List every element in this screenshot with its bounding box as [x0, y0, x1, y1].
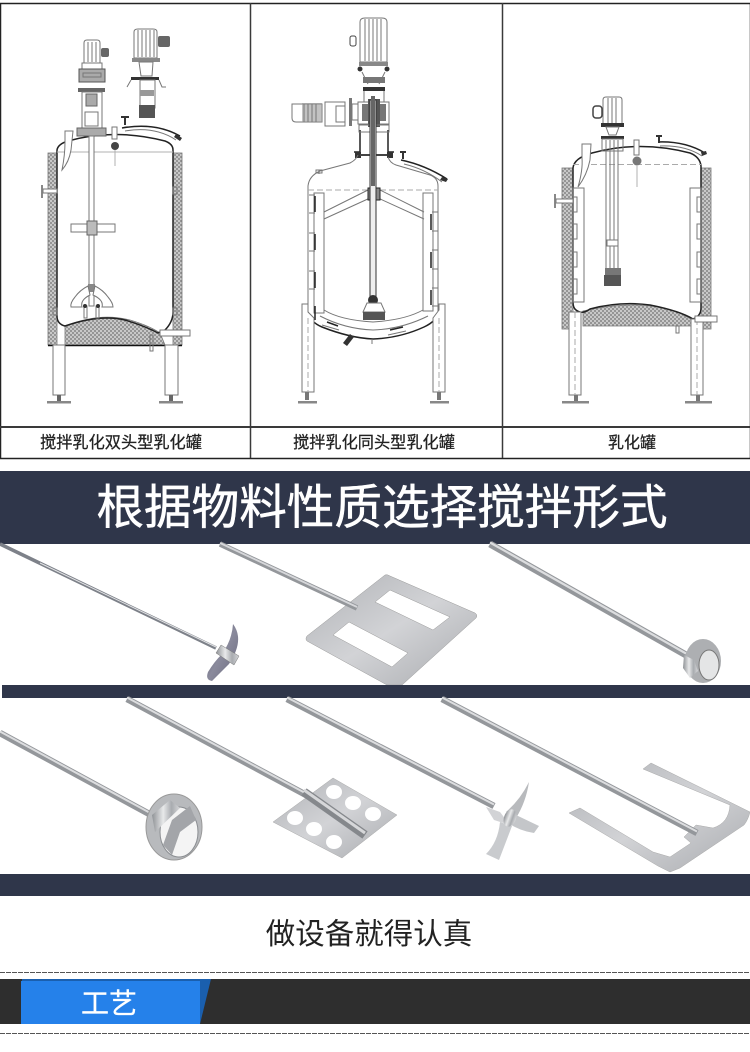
divider bar [2, 685, 750, 698]
inlet pipe, sight glass and manway [578, 135, 707, 187]
baffles [573, 188, 701, 302]
agitator row two [0, 698, 750, 872]
slogan: 做设备就得认真 [266, 918, 472, 951]
shaft and scraper [363, 96, 385, 320]
diagram: same-head emulsifying tank [292, 18, 449, 404]
diagram: double-head emulsifying tank [41, 29, 190, 404]
four-blade propeller [287, 698, 539, 860]
heating coil tabs [309, 195, 438, 335]
section label: 工艺 [81, 988, 137, 1019]
motor and rotor head [593, 97, 624, 286]
agitator row one [0, 542, 721, 685]
caption: emulsifying tank: 乳化罐 [608, 434, 656, 452]
neck [354, 125, 394, 158]
pitched blade agitator [0, 544, 239, 681]
ring impeller [0, 732, 202, 860]
caption: same-head tank: 搅拌乳化同头型乳化罐 [293, 434, 455, 452]
legs, nozzles [554, 194, 717, 404]
agitator motor and gearbox [77, 40, 109, 136]
side gear motor [292, 98, 389, 127]
agitator shaft and paddles [71, 136, 115, 318]
side nozzles and outlet [41, 185, 190, 351]
caption: double-head tank: 搅拌乳化双头型乳化罐 [40, 434, 202, 452]
comparison table of tank drawings [0, 3, 750, 458]
U-shaped anchor agitator [442, 698, 750, 872]
manway [121, 116, 182, 141]
section header: process [0, 972, 750, 1034]
emulsifier head [127, 29, 170, 118]
perforated hinged paddle [127, 698, 397, 858]
banner heading: 根据物料性质选择搅拌形式 [96, 482, 668, 535]
manway [400, 151, 448, 182]
ring turbine agitator [490, 542, 721, 683]
flat paddle agitator [220, 543, 477, 685]
top motor [350, 18, 390, 102]
diagram: emulsifying tank [554, 97, 717, 404]
footer banner bar [0, 874, 750, 896]
section banner [0, 471, 750, 544]
legs and nozzles [298, 170, 449, 404]
baffles [314, 188, 433, 330]
inlet pipe and sight glass [62, 127, 119, 170]
